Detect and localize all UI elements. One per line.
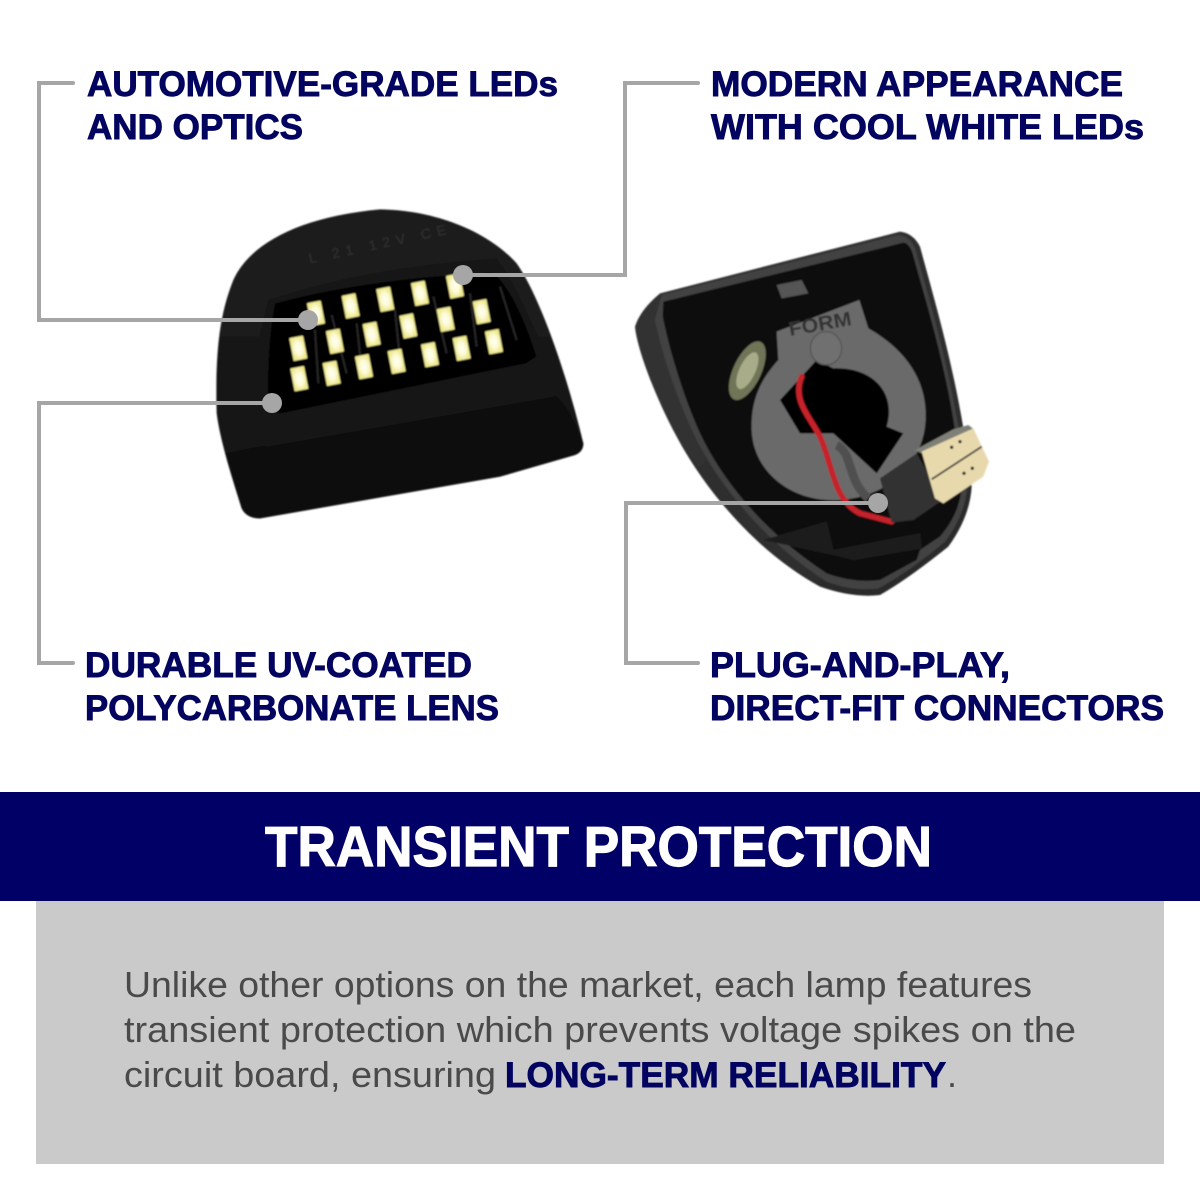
body text: .	[947, 1054, 957, 1095]
housing interior	[663, 243, 962, 581]
body text: transient protection which prevents voltage spikes on the	[124, 1009, 1076, 1050]
connector board edge	[915, 425, 974, 453]
heading: AUTOMOTIVE-GRADE LEDs	[87, 65, 558, 104]
moulded brand text: FORM	[787, 308, 853, 341]
product photo: LED lamp front	[216, 209, 583, 518]
callout: automotive-grade LEDs	[39, 65, 558, 330]
LED array	[289, 273, 503, 391]
connector boot	[880, 453, 943, 523]
lower front face	[227, 395, 583, 518]
housing shell	[635, 232, 972, 596]
lamp body	[216, 209, 583, 518]
product photo: lamp rear with connector	[635, 232, 989, 596]
panel: description	[36, 901, 1164, 1164]
circuit board ribs	[315, 287, 517, 383]
heading: DURABLE UV-COATED	[85, 646, 472, 685]
banner title: TRANSIENT PROTECTION	[265, 815, 932, 879]
heading: POLYCARBONATE LENS	[85, 689, 499, 728]
lens	[268, 273, 537, 413]
grey wire	[837, 445, 868, 498]
heading: WITH COOL WHITE LEDs	[711, 108, 1144, 147]
body text: LONG-TERM RELIABILITY	[505, 1056, 946, 1095]
callout: durable lens	[39, 393, 499, 728]
body text: Unlike other options on the market, each lamp features	[124, 964, 1032, 1005]
ring opening	[780, 360, 903, 473]
embossed lamp marking: L 21 12V CE	[307, 222, 448, 266]
lens surround	[253, 258, 553, 447]
moulded circle	[810, 332, 842, 365]
lower mount tab	[763, 522, 922, 560]
foam ring	[752, 300, 926, 500]
connector board	[922, 428, 989, 503]
retaining clip	[760, 275, 863, 353]
callout: plug-and-play connectors	[626, 493, 1164, 728]
red wire	[799, 377, 892, 522]
heading: PLUG-AND-PLAY,	[710, 646, 1010, 685]
heading: DIRECT-FIT CONNECTORS	[710, 689, 1164, 728]
callout: modern appearance	[453, 65, 1144, 285]
housing rim	[655, 235, 967, 589]
round sticker	[721, 336, 773, 405]
banner	[0, 792, 1200, 901]
heading: AND OPTICS	[87, 108, 303, 147]
body text	[124, 964, 1076, 1095]
body text: circuit board, ensuring	[124, 1054, 496, 1095]
heading: MODERN APPEARANCE	[711, 65, 1123, 104]
